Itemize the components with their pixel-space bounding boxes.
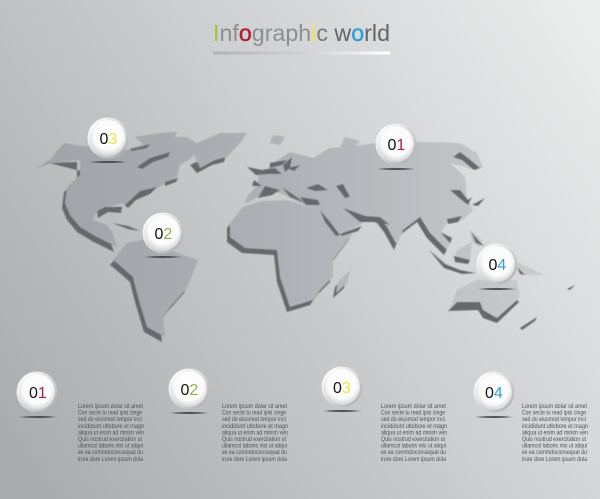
text block 03: sed do eiusmod tempor inci (381, 417, 445, 423)
text block 03: Quis nostrud exercitation ut (381, 437, 445, 443)
badge 01: 01 (29, 385, 47, 402)
pin 01 on Russia (376, 124, 416, 170)
text block 01: aliqua ut enim ad minim ven (78, 430, 144, 436)
text block 01: incididunt utlobore et magn (78, 424, 144, 430)
badge 02 (168, 368, 210, 414)
text block 02: sed do eiusmod tempor inci (222, 417, 286, 423)
title: Infographic world (213, 20, 390, 46)
badge 04: 04 (485, 385, 503, 402)
text block 02: Con secte tu read ipisi cinge (222, 411, 287, 417)
badge 03: 03 (333, 380, 351, 397)
text block 02 (222, 404, 288, 463)
text block 01: ex ea commdoconsequat du (78, 450, 143, 456)
text block 01: ullamcol laboris nisi ut aliqui (78, 444, 143, 450)
badge 01 (16, 372, 58, 418)
world map (37, 132, 575, 342)
text block 03 (381, 404, 447, 463)
text block 01: sed do eiusmod tempor inci (78, 417, 142, 423)
pin 03 on North America: 03 (100, 131, 117, 148)
map extruded shadow (49, 145, 449, 342)
pin 02 on South America (142, 212, 184, 258)
map land masses (37, 132, 545, 337)
text block 02: aliqua ut enim ad minim ven (222, 430, 288, 436)
text block 03: Con secte tu read ipisi cinge (381, 411, 446, 417)
text block 04 (522, 404, 588, 463)
pin 03 on North America (88, 118, 128, 163)
text block 03: aliqua ut enim ad minim ven (381, 430, 447, 436)
text block 03: irure dore Lorem ipsum dola (381, 457, 447, 463)
text block 02: Lorem ipsum dolar sit amet (222, 404, 287, 410)
text block 01: Lorem ipsum dolar sit amet (78, 404, 143, 410)
text block 03: Lorem ipsum dolar sit amet (381, 404, 446, 410)
pin 01 on Russia: 01 (388, 137, 405, 154)
badge 04 (474, 372, 514, 418)
text block 04: Con secte tu read ipisi cinge (522, 411, 587, 417)
text block 02: ullamcol laboris nisi ut aliqui (222, 444, 287, 450)
text block 02: ex ea commdoconsequat du (222, 450, 287, 456)
text block 01 (78, 404, 144, 463)
text block 04: ullamcol laboris nisi ut aliqui (522, 444, 587, 450)
text block 01: Quis nostrud exercitation ut (78, 437, 142, 443)
badge 03 (322, 366, 362, 412)
text block 04: Lorem ipsum dolar sit amet (522, 404, 587, 410)
text block 03: incididunt utlobore et magn (381, 424, 447, 430)
text block 04: Quis nostrud exercitation ut (522, 437, 586, 443)
pin 04 on Indonesia: 04 (488, 257, 506, 274)
text block 01: irure dore Lorem ipsum dola (78, 457, 144, 463)
text block 04: sed do eiusmod tempor inci (522, 417, 586, 423)
pin 04 on Indonesia (476, 244, 518, 290)
text block 02: irure dore Lorem ipsum dola (222, 457, 288, 463)
badge 02: 02 (180, 382, 198, 399)
text block 03: ullamcol laboris nisi ut aliqui (381, 444, 446, 450)
pin 02 on South America: 02 (154, 226, 172, 243)
text block 03: ex ea commdoconsequat du (381, 450, 446, 456)
text block 02: Quis nostrud exercitation ut (222, 437, 286, 443)
text block 04: irure dore Lorem ipsum dola (522, 457, 588, 463)
text block 04: incididunt utlobore et magn (522, 424, 588, 430)
text block 01: Con secte tu read ipisi cinge (78, 411, 143, 417)
text block 02: incididunt utlobore et magn (222, 424, 288, 430)
text block 04: aliqua ut enim ad minim ven (522, 430, 588, 436)
text block 04: ex ea commdoconsequat du (522, 450, 587, 456)
map inner seas and coast shading (97, 144, 575, 330)
